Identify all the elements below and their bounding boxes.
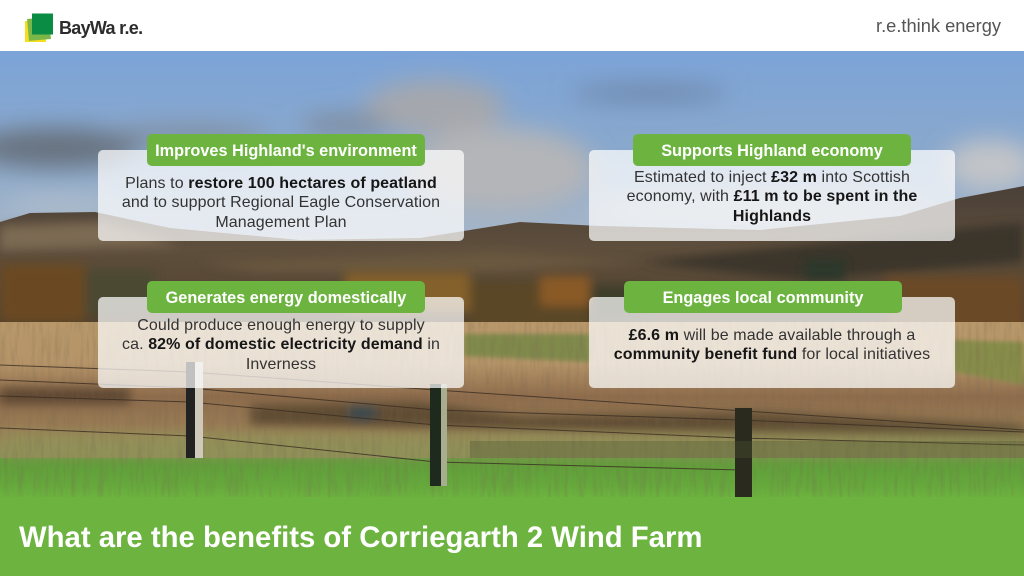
- panel: generates energy: [98, 297, 464, 388]
- panel text: £6.6 m will be made available through a: [629, 327, 915, 344]
- heading: improves environment: Improves Highland's environment: [155, 142, 417, 160]
- grass band: [0, 458, 1024, 497]
- panel text: Estimated to inject £32 m into Scottish: [634, 169, 910, 186]
- panel text: ca. 82% of domestic electricity demand in: [122, 336, 440, 353]
- panel text: Plans to restore 100 hectares of peatland: [125, 175, 437, 192]
- clouds: [0, 80, 1024, 228]
- panel: supports economy: [589, 150, 955, 241]
- panel text: [122, 317, 440, 373]
- panel text: [122, 175, 440, 231]
- panel text: community benefit fund for local initiatives: [614, 346, 930, 363]
- heading: improves environment: [147, 134, 425, 166]
- title banner: [0, 497, 1024, 576]
- logo text: BayWa r.e.: [59, 18, 142, 38]
- title: What are the benefits of Corriegarth 2 Wind Farm: [19, 521, 702, 554]
- panel text: Highlands: [733, 208, 811, 225]
- header bar: [0, 0, 1024, 51]
- tagline: r.e.think energy: [876, 15, 1001, 36]
- icon: BayWa r.e. logo mark: [25, 14, 53, 42]
- panel text: Could produce enough energy to supply: [137, 317, 425, 334]
- fence wires: [0, 365, 1024, 470]
- green pasture patches: [464, 334, 590, 362]
- panel: engages community: [589, 297, 955, 388]
- heading: supports economy: Supports Highland economy: [661, 142, 883, 160]
- heading: supports economy: [633, 134, 911, 166]
- panel text: and to support Regional Eagle Conservation: [122, 194, 440, 211]
- heading: generates energy: [147, 281, 425, 313]
- heading: engages community: Engages local community: [663, 289, 863, 307]
- panel text: Inverness: [246, 356, 316, 373]
- panel text: [627, 169, 917, 225]
- heading: generates energy: Generates energy domestically: [166, 289, 406, 307]
- fence posts: [186, 362, 752, 497]
- panel text: Management Plan: [215, 214, 347, 231]
- panel text: economy, with £11 m to be spent in the: [627, 188, 917, 205]
- autumn trees: [0, 260, 1024, 336]
- dim strip right: [470, 441, 1024, 458]
- brown moorland field: [0, 322, 1024, 458]
- hills: [0, 186, 1024, 340]
- panel text: [614, 327, 930, 363]
- heading: engages community: [624, 281, 902, 313]
- background photo: highland landscape: [0, 51, 1024, 497]
- panel: improves environment: [98, 150, 464, 241]
